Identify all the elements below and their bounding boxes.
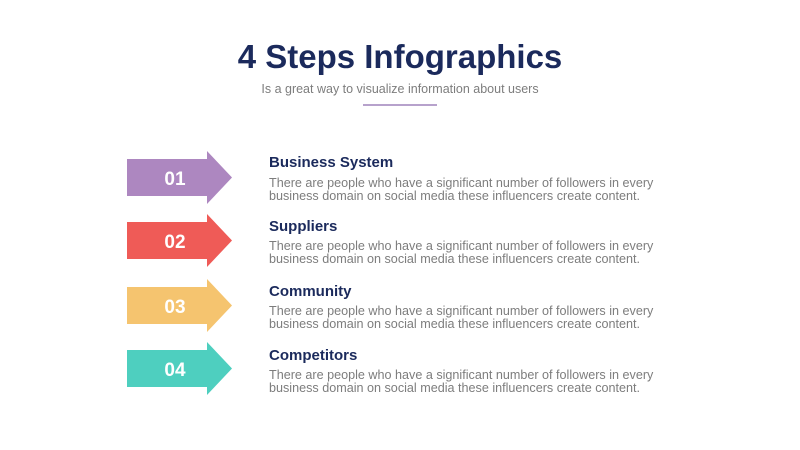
text 2: business domain on social media these influencers create content. [269,252,640,266]
text 2 [269,239,654,266]
text 2: There are people who have a significant number of followers in every [269,239,653,253]
text 1: There are people who have a significant number of followers in every [269,176,653,190]
arrow 01: 01 [164,169,186,190]
text 3: business domain on social media these influencers create content. [269,317,640,331]
arrow 02: 02 [164,232,186,253]
subtitle: Is a great way to visualize information about users [261,82,539,96]
arrow 02 [127,214,232,267]
underline accent [363,104,437,106]
text 4 [269,368,654,395]
heading 3: Community [269,283,352,300]
arrow 03: 03 [164,297,186,318]
heading 1: Business System [269,154,393,171]
text 3: There are people who have a significant number of followers in every [269,304,653,318]
heading 4: Competitors [269,347,357,364]
text 3 [269,304,654,331]
heading 2: Suppliers [269,218,337,235]
arrow 04 [127,342,232,395]
text 4: There are people who have a significant number of followers in every [269,368,653,382]
arrow 04: 04 [164,360,186,381]
arrow 03 [127,279,232,332]
text 4: business domain on social media these influencers create content. [269,381,640,395]
title: 4 Steps Infographics [238,38,562,75]
text 1: business domain on social media these influencers create content. [269,189,640,203]
text 1 [269,176,654,203]
arrow 01 [127,151,232,204]
